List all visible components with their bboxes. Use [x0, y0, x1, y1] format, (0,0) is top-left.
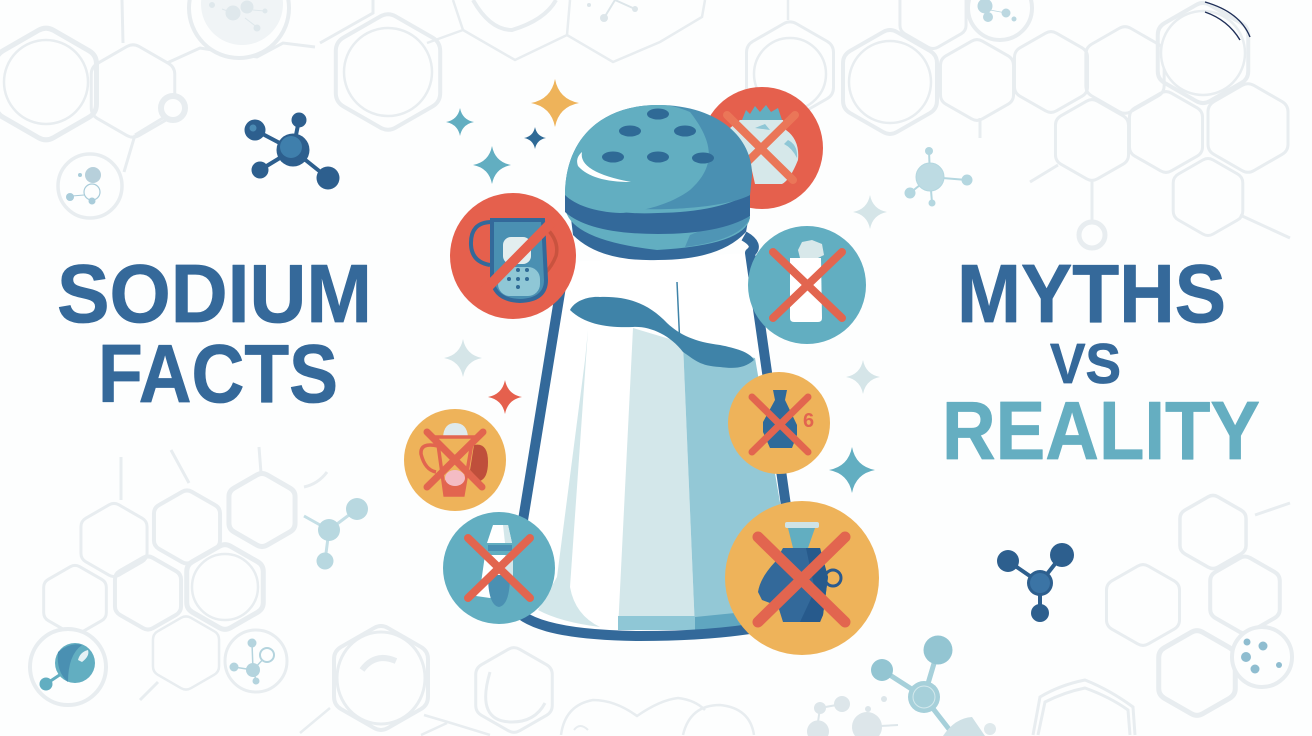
faint molecule: top circle	[210, 1, 267, 31]
icon: large yellow circle, jug crossed out	[725, 501, 879, 655]
top-centre hexagons	[427, 0, 834, 118]
heading word: FACTS: FACTS	[98, 327, 338, 420]
sparkles	[444, 79, 887, 493]
icon: red circle, salt bowl crossed out	[701, 87, 823, 209]
molecule icon: light teal top right	[904, 147, 972, 206]
bottom-right hexagons	[1033, 495, 1292, 735]
glass outline	[510, 236, 802, 636]
icon: red circle, mug crossed out	[450, 193, 576, 319]
molecule icon: teal bottom right	[871, 636, 996, 736]
number 6: 6	[803, 410, 814, 432]
molecule icon: blue ball bottom left	[40, 643, 95, 690]
faint molecule cluster bottom right	[807, 696, 898, 736]
molecule icon: small circle top left	[66, 167, 101, 204]
icon: teal circle, bottle crossed out	[748, 226, 866, 344]
top-left hexagons	[0, 0, 440, 218]
heading word: MYTHS: MYTHS	[957, 247, 1226, 340]
heading word: SODIUM: SODIUM	[57, 247, 372, 340]
title: Sodium Facts	[57, 247, 372, 420]
icon: yellow circle, small bottle with number 6 crossed out	[728, 372, 830, 474]
glass body contents	[510, 253, 800, 636]
faint molecule: top right circle	[978, 0, 1016, 22]
heading word: REALITY: REALITY	[942, 384, 1260, 477]
heading word: VS: VS	[1050, 332, 1121, 396]
title: Myths vs Reality	[942, 247, 1260, 477]
icon: teal circle, shaker crossed out	[443, 512, 555, 624]
shaker cap	[565, 105, 752, 260]
molecule icon: dark blue bottom right	[997, 543, 1074, 622]
salt shaker	[510, 105, 802, 636]
dark arc accent	[1205, 2, 1250, 40]
faint molecule: top centre	[587, 0, 638, 22]
molecule icon: small circle bottom left	[230, 638, 274, 684]
top-right hexagons	[843, 0, 1290, 248]
bottom-left hexagons	[30, 447, 327, 705]
icon: yellow circle, pitcher crossed out	[404, 409, 506, 511]
liquid wave	[570, 297, 754, 368]
bottom-centre hexagons	[300, 626, 754, 735]
molecule icon: light teal mid left	[304, 498, 368, 570]
molecule icon: small circle bottom right	[1241, 638, 1282, 674]
molecule icon: dark blue top left	[244, 112, 340, 190]
